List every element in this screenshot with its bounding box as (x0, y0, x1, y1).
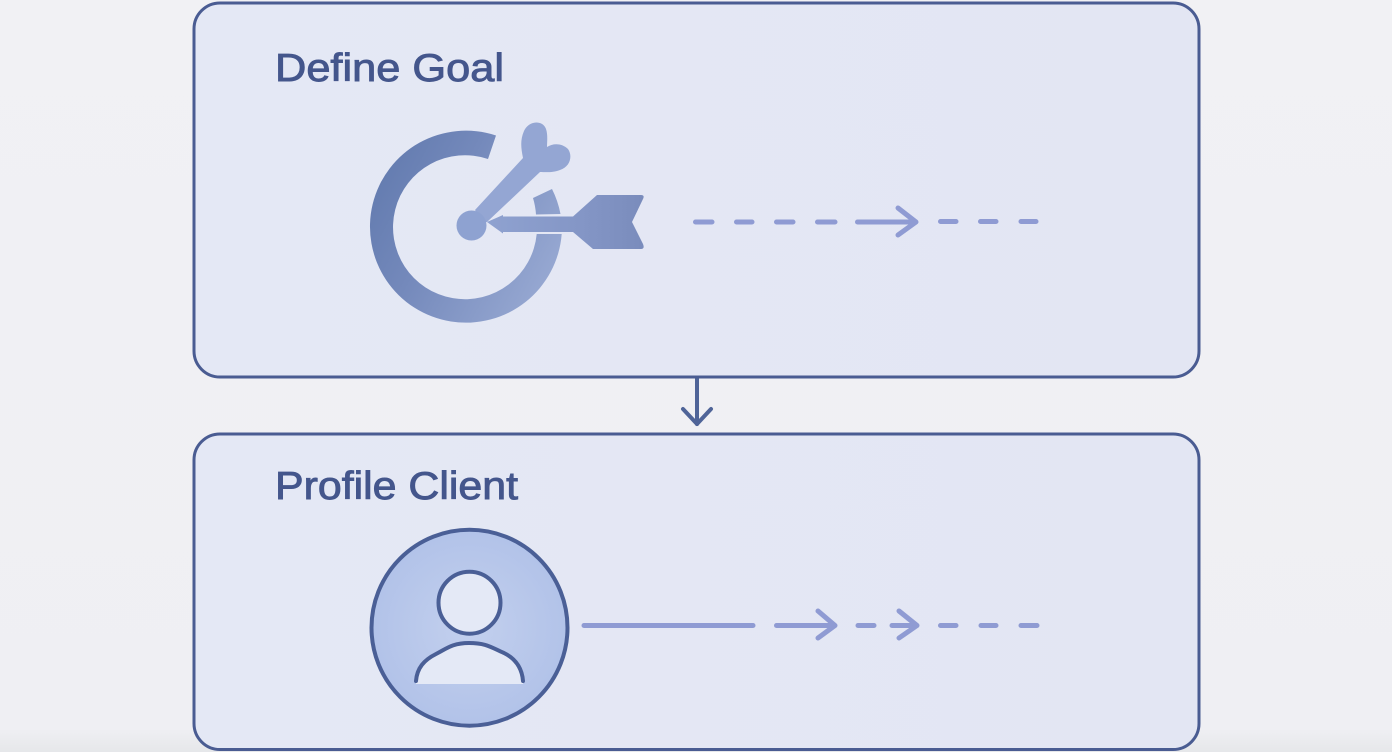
panel: profile client (194, 434, 1199, 750)
connector arrow between panels (683, 378, 711, 424)
icon: target with arrow (370, 122, 644, 323)
heading: define goal: Define Goal (275, 47, 504, 90)
icon: client avatar (372, 530, 568, 726)
heading: profile client: Profile Client (275, 465, 518, 508)
mixed arrow: client path (584, 611, 1037, 638)
panel: define goal (194, 3, 1199, 377)
dashed arrow: goal path (696, 208, 1036, 235)
